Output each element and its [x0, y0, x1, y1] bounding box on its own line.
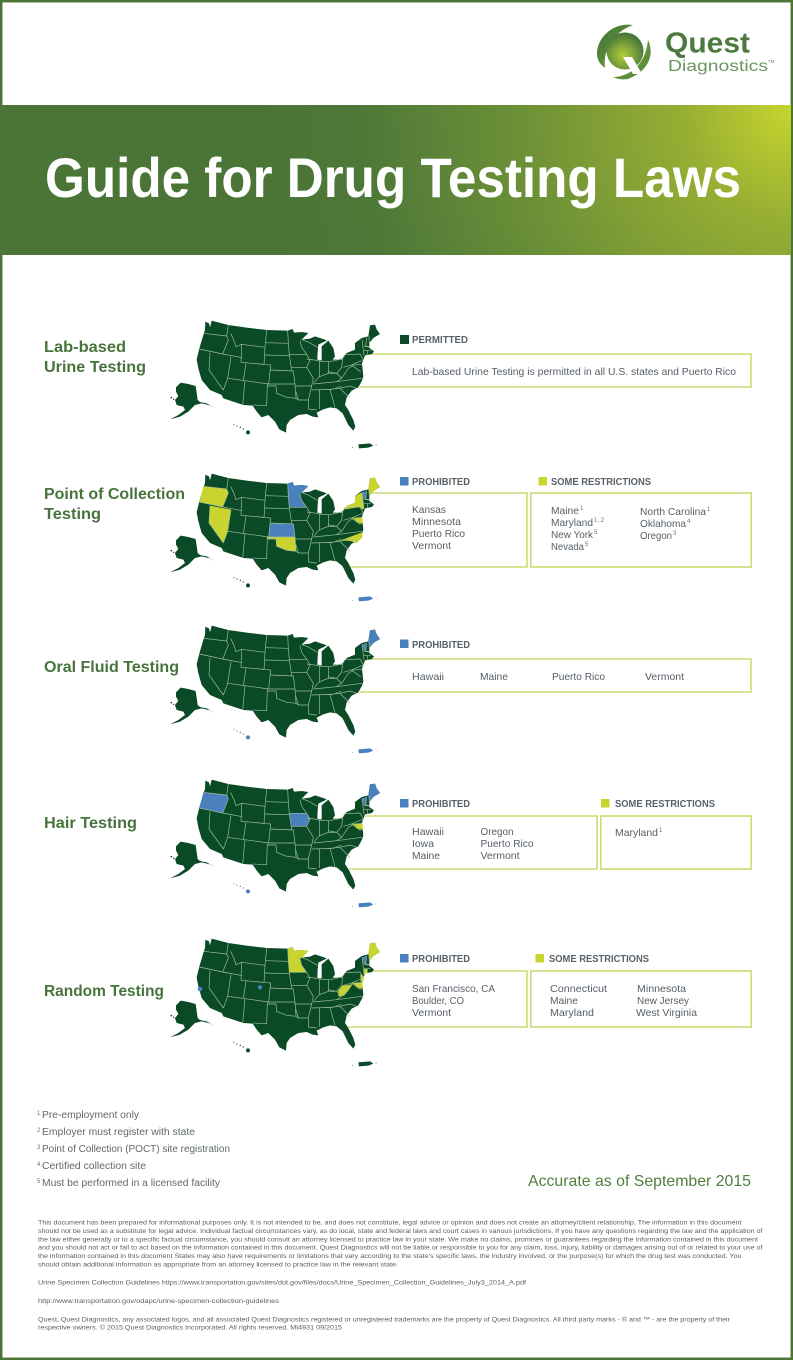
footnotes: 5 — [37, 1179, 41, 1185]
legal disclaimer: Urine Specimen Collection Guidelines https://www.transportation.gov/sites/dot.gov/files/docs/Urine_Specimen_Collection_Guidelines_July3_2014_A.pdf — [38, 1280, 526, 1286]
legal disclaimer: the law either generally or to a specific factual circumstance, you should consult an attorney licensed to practice law in your state. We make no claims, promises or guarantees regarding the information contained in this document — [38, 1236, 758, 1243]
legal disclaimer: This document has been prepared for informational purposes only. It is not intended to be, and does not constitute, legal advice or opinion and does not create an attorney/client relationship. The information in this document — [38, 1220, 742, 1226]
footnotes: Employer must register with state — [42, 1127, 195, 1138]
restrictions box: 3 — [673, 531, 677, 537]
legal disclaimer: should obtain additional information as appropriate from an attorney licensed to practice law in the relevant state. — [38, 1262, 398, 1268]
heading: Testing — [44, 506, 101, 523]
panel: hair testing — [44, 780, 751, 907]
restrictions box: 5 — [594, 530, 598, 536]
restrictions box: Oregon — [640, 530, 672, 542]
restrictions box — [601, 816, 751, 869]
footnotes: Certified collection site — [42, 1161, 146, 1172]
trademark: TM — [768, 59, 775, 64]
panel: oral fluid testing — [44, 626, 751, 753]
restrictions box: Maryland — [551, 517, 593, 529]
heading — [44, 339, 146, 376]
heading: Point of Collection — [44, 486, 185, 503]
prohibited box: Minnesota — [412, 516, 461, 528]
title: Guide for Drug Testing Laws — [45, 146, 741, 209]
legal disclaimer — [38, 1220, 763, 1332]
restrictions box: Maine — [551, 505, 579, 517]
heading: Hair Testing — [44, 815, 137, 832]
map: point of collection — [170, 474, 380, 601]
footnotes: Pre-employment only — [42, 1110, 139, 1121]
restrictions box: Maine — [550, 995, 578, 1007]
map: lab-based — [170, 321, 380, 448]
legend: some restrictions: SOME RESTRICTIONS — [551, 477, 651, 488]
panel: random testing — [44, 939, 751, 1066]
prohibited box — [360, 659, 751, 692]
heading: Urine Testing — [44, 359, 146, 376]
prohibited box: Vermont — [412, 540, 451, 552]
prohibited box: Puerto Rico — [412, 528, 465, 540]
restrictions box — [531, 971, 751, 1027]
restrictions box: North Carolina — [640, 506, 706, 518]
restrictions box: 1, 2 — [594, 518, 605, 524]
restrictions box: 4 — [687, 519, 691, 525]
prohibited box — [349, 816, 597, 869]
restrictions box: West Virginia — [636, 1007, 697, 1019]
prohibited box: Hawaii — [412, 671, 444, 683]
restrictions box: New Jersey — [637, 995, 690, 1007]
legal disclaimer: and you should not act or fail to act based on the information contained in this document. Quest Diagnostics will not be liable or responsible to you for any claim, loss, injury, liability or damages arising out of or related to your use of — [38, 1245, 763, 1252]
prohibited box: San Francisco, CA — [412, 983, 495, 995]
map: oral fluid — [170, 626, 380, 753]
prohibited box: Oregon — [480, 826, 514, 838]
restrictions box: 5 — [585, 542, 589, 548]
title banner — [2, 105, 791, 255]
footnotes: Point of Collection (POCT) site registration — [42, 1144, 230, 1155]
prohibited box: Hawaii — [412, 826, 444, 838]
restrictions box: 1 — [707, 507, 711, 513]
logo wordmark: Quest — [665, 28, 750, 60]
restrictions box: 1 — [580, 506, 584, 512]
legend: permitted: PERMITTED — [412, 335, 468, 346]
restrictions box: Nevada — [551, 541, 584, 553]
logo subline: Diagnostics — [668, 58, 768, 75]
panel: point of collection testing — [44, 474, 751, 601]
footnotes: Must be performed in a licensed facility — [42, 1178, 220, 1189]
footnotes: 3 — [37, 1145, 41, 1151]
footnotes: 2 — [37, 1128, 41, 1134]
prohibited box: Kansas — [412, 504, 446, 516]
legend: some restrictions: SOME RESTRICTIONS — [549, 954, 649, 965]
panel: lab-based urine testing — [44, 321, 751, 448]
legal disclaimer: respective owners. © 2015 Quest Diagnostics Incorporated. All rights reserved. MI4931 09/2015 — [38, 1324, 342, 1332]
heading: Oral Fluid Testing — [44, 659, 179, 676]
restrictions box: New York — [551, 529, 594, 541]
heading: Random Testing — [44, 983, 164, 1000]
map: random — [170, 939, 380, 1066]
heading — [44, 486, 185, 523]
legend: prohibited: PROHIBITED — [412, 477, 470, 488]
legal disclaimer: Quest, Quest Diagnostics, any associated logos, and all associated Quest Diagnostics registered or unregistered trademarks are the property of Quest Diagnostics. All third party marks - ® and ™ - are the property of their — [38, 1316, 731, 1324]
legal disclaimer: should not be used as a substitute for legal advice. Individual factual circumstances vary, as do local, state and federal laws and court cases in various jurisdictions. If you have any questions regarding the law and the application of — [38, 1228, 763, 1235]
restrictions box: Oklahoma — [640, 518, 686, 530]
legend: prohibited: PROHIBITED — [412, 954, 470, 965]
legal disclaimer: http://www.transportation.gov/odapc/urine-specimen-collection-guidelines — [38, 1298, 280, 1305]
footnotes: 4 — [37, 1162, 41, 1168]
prohibited box: Maine — [480, 671, 508, 683]
prohibited box: Vermont — [480, 850, 520, 862]
prohibited box: Vermont — [645, 671, 684, 683]
restrictions box: 1 — [659, 828, 663, 834]
footnotes: 1 — [37, 1111, 41, 1117]
map: hair — [170, 780, 380, 907]
heading: Lab-based — [44, 339, 126, 356]
restrictions box — [531, 493, 751, 567]
prohibited box: Puerto Rico — [552, 671, 605, 683]
legend: prohibited: PROHIBITED — [412, 799, 470, 810]
legal disclaimer: the information contained in this document States may also have requirements or limitations that vary according to the state's specific laws, the industry involved, or the purpose(s) for which the drug test was conducted. You — [38, 1253, 742, 1260]
prohibited box: Puerto Rico — [480, 838, 534, 850]
footnotes — [37, 1110, 230, 1189]
prohibited box: Boulder, CO — [412, 995, 464, 1007]
legend: prohibited: PROHIBITED — [412, 640, 470, 651]
accuracy date: Accurate as of September 2015 — [528, 1173, 751, 1190]
permitted box: Lab-based Urine Testing is permitted in all U.S. states and Puerto Rico — [412, 366, 736, 378]
restrictions box: Minnesota — [637, 983, 686, 995]
prohibited box — [348, 971, 527, 1027]
restrictions box: Connecticut — [550, 983, 607, 995]
prohibited box — [350, 493, 527, 567]
icon: Q mark — [597, 25, 651, 79]
restrictions box: Maryland — [615, 827, 658, 839]
prohibited box: Maine — [412, 850, 440, 862]
prohibited box: Iowa — [412, 838, 434, 850]
permitted box — [360, 354, 751, 387]
prohibited box: Vermont — [412, 1007, 451, 1019]
logo: Quest Diagnostics — [597, 25, 775, 79]
restrictions box: Maryland — [550, 1007, 594, 1019]
legend: some restrictions: SOME RESTRICTIONS — [615, 799, 715, 810]
